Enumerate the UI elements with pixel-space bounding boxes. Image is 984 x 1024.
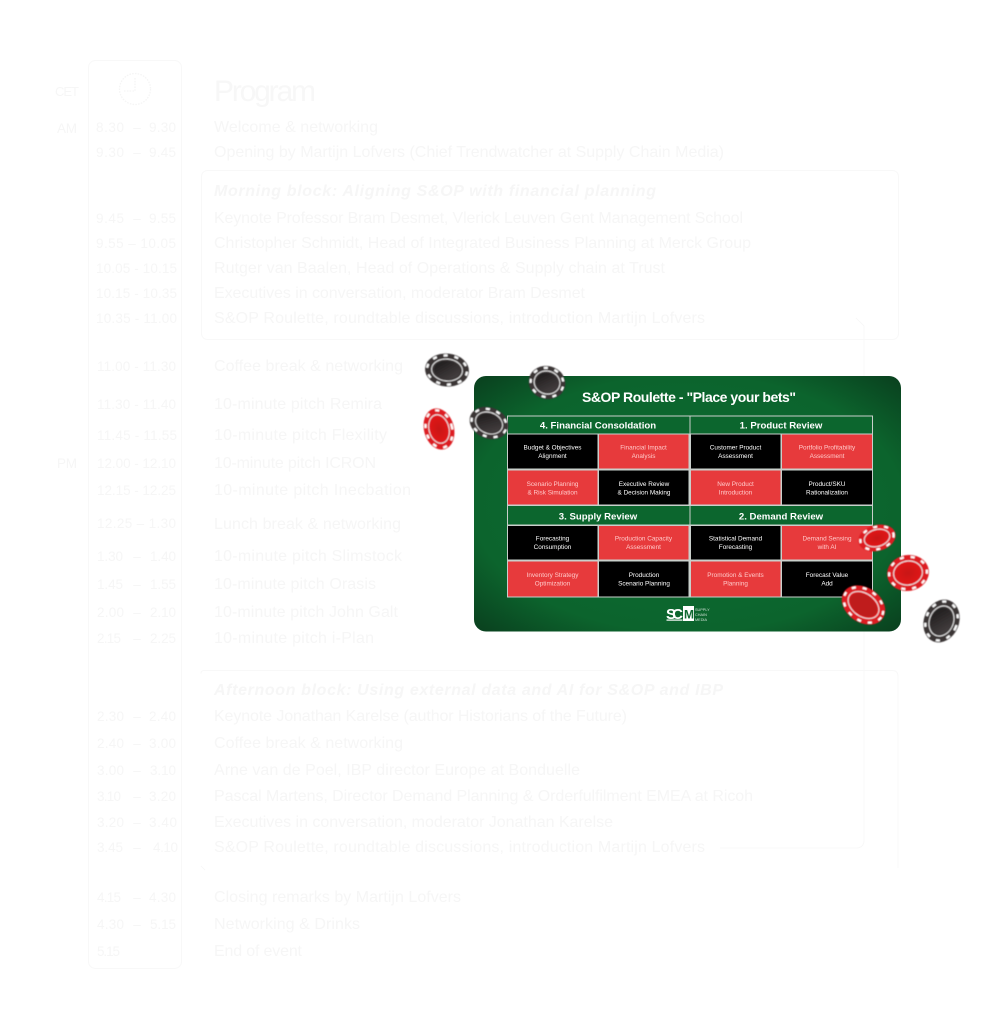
time column entries: 3.10	[97, 789, 121, 804]
time column entries: 11.45 - 11.55	[97, 428, 177, 443]
text block: afternoon block agenda: Coffee break & networking	[214, 735, 403, 752]
quadrant: 3. Supply Review: 3. Supply Review	[559, 512, 638, 522]
logo: Supply Chain Media	[666, 606, 710, 623]
time column entries: –	[133, 815, 141, 830]
time column entries: 2.00	[97, 605, 124, 620]
time column entries: 3.00	[149, 736, 176, 751]
quadrant: 2. Demand Review: Promotion & Events	[707, 572, 764, 579]
time column entries: 3.20	[97, 815, 124, 830]
quadrant: 3. Supply Review: Inventory Strategy	[527, 572, 579, 579]
time column entries: –	[133, 631, 141, 646]
text block: opening agenda: Opening by Martijn Lofvers (Chief Trendwatcher at Supply Chain Media)	[214, 144, 724, 161]
quadrant: 3. Supply Review: Production Capacity	[615, 536, 673, 542]
quadrant: 4. Financial Consolidation: & Decision Making	[618, 490, 671, 496]
icon: black chip on card top	[525, 362, 569, 403]
icon: clock	[120, 74, 150, 104]
quadrant: 1. Product Review: 1. Product Review	[740, 420, 823, 432]
time column entries: 4.10	[153, 840, 178, 855]
logo: Supply Chain Media: SUPPLY	[695, 608, 710, 612]
time column entries: 9.55	[149, 211, 176, 226]
time column entries: –	[133, 709, 141, 724]
quadrant: 4. Financial Consolidation: Executive Review	[619, 481, 670, 488]
label: AM: AM	[57, 121, 77, 136]
time column entries: 2.25	[150, 631, 176, 646]
quadrant: 4. Financial Consolidation: & Risk Simulation	[527, 490, 578, 496]
table frame	[507, 416, 873, 598]
time column entries: –	[133, 736, 141, 751]
quadrant: 4. Financial Consolidation: Analysis	[632, 453, 655, 460]
time column entries: –	[133, 789, 141, 804]
text block: midday agenda: 10-minute pitch Remira	[214, 396, 382, 413]
time column entries: 2.40	[97, 736, 124, 751]
text block: morning block agenda: Morning block: Aligning S&OP with financial planning	[214, 183, 656, 200]
time column entries: 11.30 - 11.40	[97, 397, 176, 412]
text block: midday agenda: 10-minute pitch i-Plan	[214, 630, 374, 647]
time column entries: 4.30	[97, 917, 124, 932]
text block: closing agenda: Networking & Drinks	[214, 916, 360, 933]
quadrant: 2. Demand Review: Add	[821, 580, 833, 588]
time column entries: 3.10	[150, 763, 176, 778]
time column entries: 3.20	[149, 789, 176, 804]
time column entries: –	[133, 917, 141, 932]
panel: S&OP Roulette card	[474, 376, 901, 632]
time column entries: 1.40	[150, 549, 176, 564]
text block: midday agenda: 10-minute pitch Orasis	[214, 576, 376, 593]
quadrant: 1. Product Review: Assessment	[810, 453, 845, 460]
quadrant: 3. Supply Review: Consumption	[534, 544, 572, 551]
quadrant: 1. Product Review: Customer Product	[710, 444, 761, 452]
title: S&OP Roulette: S&OP Roulette - "Place your bets"	[582, 389, 796, 405]
quadrant: 2. Demand Review: with AI	[817, 544, 837, 551]
text block: morning block agenda	[214, 183, 751, 327]
text block: afternoon block agenda: Pascal Martens, Director Demand Planning & Orderfulfilment EMEA at Ricoh	[214, 788, 753, 805]
time column entries: –	[133, 605, 141, 620]
time column entries: 5.15	[150, 917, 176, 932]
logo: Supply Chain Media: SC	[666, 606, 683, 623]
time column entries: 12.00 - 12.10	[97, 456, 176, 471]
time column entries: 12.25 – 1.30	[97, 516, 176, 531]
text block: midday agenda: 10-minute pitch Slimstock	[214, 548, 403, 565]
time column entries: 9.45	[149, 145, 176, 160]
quadrant: 1. Product Review: Product/SKU	[809, 481, 846, 488]
panel: afternoon block outline	[201, 670, 898, 870]
time column entries: 10.05 - 10.15	[96, 261, 177, 276]
quadrant: 1. Product Review: Portfolio Profitability	[799, 444, 856, 452]
quadrant: 3. Supply Review: Assessment	[626, 544, 661, 551]
quadrant: 3. Supply Review: Optimization	[535, 580, 571, 588]
text block: midday agenda: 10-minute pitch ICRON	[214, 455, 376, 472]
quadrant: 1. Product Review: New Product	[717, 481, 754, 488]
time column entries: 2.15	[97, 631, 121, 646]
text block: midday agenda: 10-minute pitch Inecbation	[214, 482, 411, 499]
icon: black chip top left	[424, 352, 470, 388]
time column entries: –	[133, 120, 141, 135]
time column entries: –	[133, 549, 141, 564]
quadrant: 2. Demand Review: 2. Demand Review	[739, 512, 824, 522]
time column entries: 9.30	[96, 145, 124, 160]
text block: afternoon block agenda: S&OP Roulette, roundtable discussions, introduction Martijn Lofvers	[214, 839, 705, 856]
time column entries: –	[133, 211, 141, 226]
time column entries	[96, 120, 178, 959]
time column entries: 3.40	[149, 815, 177, 830]
time column entries: 2.40	[149, 709, 176, 724]
text block: afternoon block agenda	[213, 682, 753, 856]
time column entries: 1.45	[97, 577, 123, 592]
quadrant: 2. Demand Review: Demand Sensing	[802, 536, 852, 542]
icon: red chip small	[855, 521, 899, 555]
logo: Supply Chain Media: CHAIN	[695, 613, 707, 617]
text block: afternoon block agenda: Afternoon block: Using external data and AI for S&OP and IBP	[213, 682, 723, 699]
text block: midday agenda: 10-minute pitch Flexility	[214, 427, 387, 444]
quadrant: 4. Financial Consolidation: Budget & Objectives	[524, 444, 581, 452]
panel: morning block outline	[202, 170, 898, 340]
text block: midday agenda	[214, 358, 411, 647]
quadrant: 4. Financial Consolidation	[508, 420, 688, 504]
time column entries: –	[133, 577, 141, 592]
time column entries: 3.00	[97, 763, 124, 778]
time column entries: 10.15 - 10.35	[96, 286, 177, 301]
label: CET time zone: CET	[55, 84, 79, 99]
text block: morning block agenda: Executives in conversation, moderator Bram Desmet	[214, 285, 586, 302]
time column entries: –	[133, 763, 141, 778]
text block: closing agenda: End of event	[214, 943, 303, 960]
quadrant: 2. Demand Review: Planning	[723, 580, 748, 588]
text block: morning block agenda: Christopher Schmidt, Head of Integrated Business Planning at Merck Group	[214, 235, 751, 252]
icon: red chip right	[884, 552, 932, 594]
time column entries: 2.10	[150, 605, 176, 620]
quadrant: 2. Demand Review	[691, 512, 872, 596]
text block: midday agenda: Coffee break & networking	[214, 358, 403, 375]
icon: black chip on card corner	[465, 401, 513, 445]
text block: afternoon block agenda: Arne van de Poel, IBP director Europe at Bonduelle	[214, 762, 580, 779]
quadrant: 2. Demand Review: Statistical Demand	[709, 536, 763, 542]
quadrant: 1. Product Review: Introduction	[719, 490, 753, 496]
time column entries: –	[133, 890, 141, 905]
quadrant: 4. Financial Consolidation: 4. Financial Consoldation	[540, 420, 656, 432]
time column entries: 4.30	[149, 890, 176, 905]
quadrant: 3. Supply Review: Forecasting	[536, 536, 570, 542]
time column entries: 2.30	[97, 709, 124, 724]
text block: opening agenda	[214, 119, 724, 161]
heading: Program: Program	[214, 75, 316, 108]
logo: Supply Chain Media: M	[684, 608, 694, 622]
time column entries: 12.15 - 12.25	[97, 483, 176, 498]
time column entries: 8.30	[96, 120, 124, 135]
text block: afternoon block agenda: Keynote Jonathan Karelse (author Historians of the Future)	[214, 708, 627, 725]
icon: red chip left	[419, 405, 459, 453]
icon: black chip bottom right	[917, 594, 966, 648]
text block: closing agenda: Closing remarks by Martijn Lofvers	[214, 889, 461, 906]
time column entries: 10.35 - 11.00	[96, 311, 177, 326]
time column entries: 5.15	[97, 944, 120, 959]
label: PM: PM	[57, 456, 77, 471]
quadrant: 3. Supply Review: Production	[629, 572, 660, 579]
logo: Supply Chain Media: MEDIA	[695, 618, 707, 622]
time column entries: 1.30	[97, 549, 123, 564]
time column entries: 9.30	[149, 120, 176, 135]
text block: morning block agenda: Rutger van Baalen, Head of Operations & Supply chain at Trust	[214, 260, 666, 277]
quadrant: 2. Demand Review: Forecasting	[719, 544, 753, 551]
connector line: roulette link	[720, 318, 864, 848]
icon: red chip large	[834, 577, 893, 633]
time column entries: –	[133, 840, 141, 855]
time column entries: 1.55	[150, 577, 176, 592]
text block: closing agenda	[214, 889, 461, 960]
quadrant: 1. Product Review: Assessment	[718, 453, 753, 460]
time column entries: 3.45	[97, 840, 123, 855]
text block: morning block agenda: Keynote Professor Bram Desmet, Vlerick Leuven Gent Management School	[214, 210, 743, 227]
quadrant: 1. Product Review	[691, 420, 872, 504]
quadrant: 1. Product Review: Rationalization	[806, 490, 848, 496]
text block: midday agenda: 10-minute pitch John Galt	[214, 604, 399, 621]
time column entries: 11.00 - 11.30	[97, 359, 176, 374]
time column entries: 9.55 – 10.05	[96, 236, 176, 251]
quadrant: 4. Financial Consolidation: Scenario Planning	[527, 481, 579, 488]
time column entries: –	[133, 145, 141, 160]
text block: midday agenda: Lunch break & networking	[214, 516, 401, 533]
text block: opening agenda: Welcome & networking	[214, 119, 378, 136]
text block: afternoon block agenda: Executives in conversation, moderator Jonathan Karelse	[214, 814, 613, 831]
quadrant: 4. Financial Consolidation: Financial Impact	[620, 444, 667, 452]
quadrant: 3. Supply Review	[508, 512, 688, 596]
quadrant: 2. Demand Review: Forecast Value	[806, 572, 849, 579]
text block: morning block agenda: S&OP Roulette, roundtable discussions, introduction Martijn Lofvers	[214, 310, 705, 327]
quadrant: 3. Supply Review: Scenario Planning	[618, 580, 670, 588]
panel: time column outline	[88, 60, 182, 968]
time column entries: 9.45	[96, 211, 124, 226]
quadrant: 4. Financial Consolidation: Alignment	[538, 453, 567, 460]
time column entries: 4.15	[97, 890, 121, 905]
